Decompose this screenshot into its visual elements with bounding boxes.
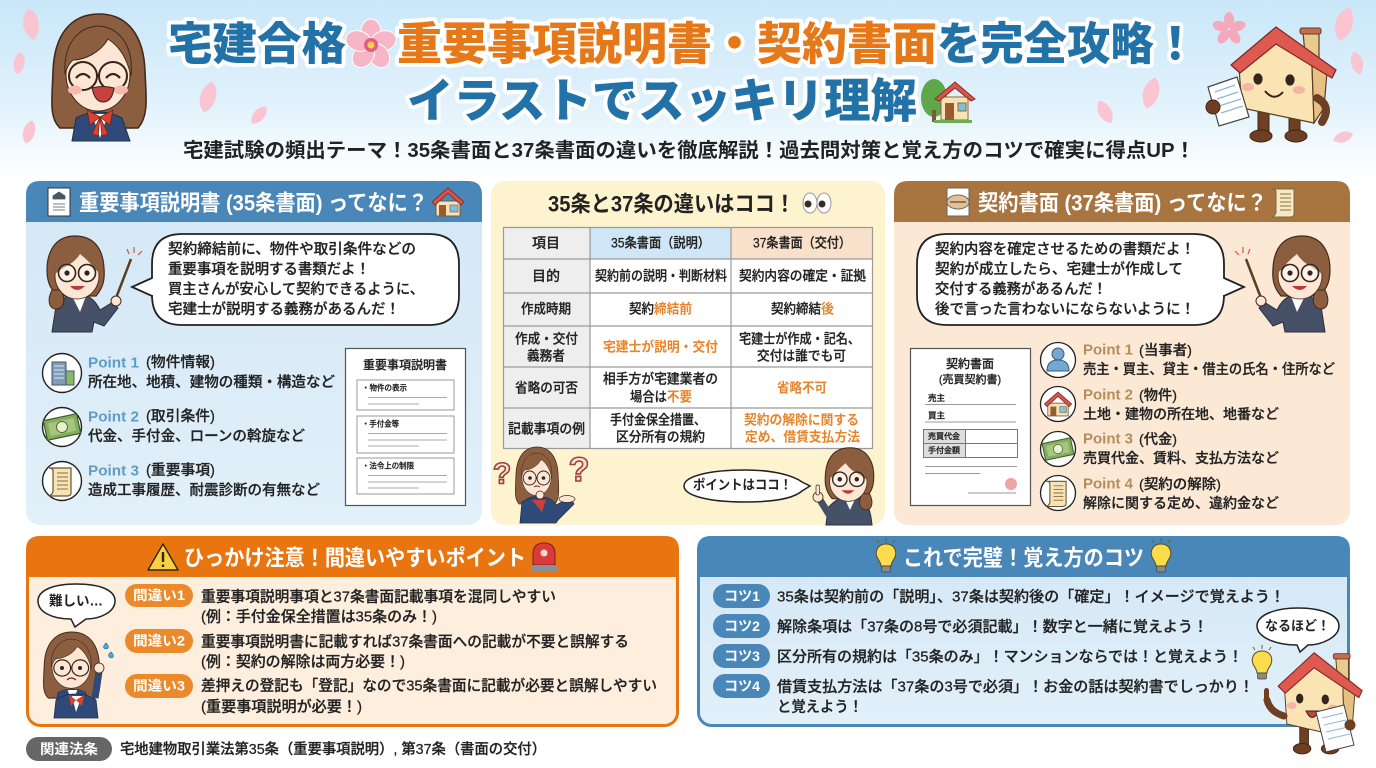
comparison table: 後 bbox=[821, 300, 834, 316]
comparison table: 37条書面（交付） bbox=[753, 234, 851, 250]
mistake 2: 間違い2 bbox=[133, 632, 185, 648]
document: 重要事項説明書: ・法令上の制限 bbox=[362, 460, 414, 470]
title line 2: イラストでスッキリ理解 bbox=[407, 74, 917, 128]
comparison table: 締結前 bbox=[654, 300, 692, 316]
point 1 bbox=[42, 354, 335, 392]
mistake 3 bbox=[125, 674, 657, 716]
tip 2: 解除条項は「37条の8号で必須記載」！数字と一緒に覚えよう！ bbox=[777, 618, 1208, 636]
heading: 違い: 35条と37条の違いはココ！ bbox=[548, 192, 795, 216]
document: 重要事項説明書: ・手付金等 bbox=[362, 418, 399, 428]
point 2: Point 2 bbox=[88, 408, 139, 426]
icon: light bulb right bbox=[1151, 538, 1171, 572]
mistake 1: 重要事項説明事項と37条書面記載事項を混同しやすい bbox=[201, 588, 556, 606]
document: 契約書面: 買主 bbox=[928, 410, 946, 420]
footer: related law bbox=[26, 737, 546, 761]
document: 重要事項説明書 bbox=[346, 348, 466, 506]
header sky background bbox=[0, 0, 1376, 178]
point 3: Point 3 bbox=[1083, 430, 1133, 448]
comparison table: 省略の可否 bbox=[515, 380, 578, 396]
mistake 1: 間違い1 bbox=[133, 587, 186, 603]
speech bubble: 35条: 契約締結前に、物件や取引条件などの bbox=[168, 240, 416, 258]
question marks: ? bbox=[493, 458, 511, 490]
comparison table: 義務者 bbox=[527, 348, 565, 364]
document: 契約書面: 手付金額 bbox=[928, 445, 960, 455]
comparison table: 契約前の説明・判断材料 bbox=[595, 268, 727, 284]
icon: house bbox=[432, 188, 464, 216]
mistake 2: 重要事項説明書に記載すれば37条書面への記載が不要と誤解する bbox=[201, 632, 629, 650]
document: 契約書面: 契約書面 bbox=[946, 356, 994, 371]
icon: light bulb left bbox=[876, 538, 896, 572]
point 2: 代金、手付金、ローンの斡旋など bbox=[88, 428, 305, 445]
panel: 35条と37条の違い bbox=[491, 181, 885, 525]
icon: house with tree bbox=[921, 79, 975, 123]
document: 契約書面 bbox=[910, 348, 1030, 506]
character: teacher bbox=[47, 236, 142, 332]
speech bubble: 35条: 重要事項を説明する書類だよ！ bbox=[168, 261, 370, 278]
tip 1 bbox=[713, 584, 1285, 608]
tip 3: 区分所有の規約は「35条のみ」！マンションならでは！と覚えよう！ bbox=[777, 648, 1243, 666]
comparison table: 作成時期 bbox=[521, 302, 571, 316]
point 1: (物件情報) bbox=[146, 354, 215, 371]
speech bubble: 37条: 交付する義務があるんだ！ bbox=[935, 280, 1107, 298]
tip 2 bbox=[713, 614, 1208, 638]
icon: building document bbox=[48, 188, 70, 216]
comparison table: 作成・交付 bbox=[515, 332, 578, 346]
comparison table: 区分所有の規約 bbox=[616, 430, 705, 444]
speech bubble: 35条: 買主さんが安心して契約できるように、 bbox=[168, 280, 424, 298]
document: 契約書面: 売買代金 bbox=[928, 431, 960, 441]
panel: ひっかけ注意 bbox=[26, 536, 679, 726]
point 3: 造成工事履歴、耐震診断の有無など bbox=[88, 482, 320, 499]
panel header: コツ bbox=[697, 536, 1350, 577]
comparison table: 項目 bbox=[532, 235, 560, 251]
title line 1 bbox=[168, 18, 1197, 70]
mistake 3: 間違い3 bbox=[133, 678, 186, 694]
speech bubble: ポイントはココ: ポイントはココ！ bbox=[693, 478, 792, 492]
speech bubble: なるほど: なるほど！ bbox=[1265, 618, 1330, 634]
tip 4 bbox=[713, 674, 1254, 716]
comparison table: 相手方が宅建業者の bbox=[603, 370, 718, 386]
speech bubble: 37条: 契約内容を確定させるための書類だよ！ bbox=[935, 241, 1195, 258]
comparison table: 場合は bbox=[630, 388, 667, 404]
point 3 bbox=[42, 462, 320, 500]
point 4: Point 4 bbox=[1083, 476, 1134, 492]
cherry blossom petals bbox=[12, 5, 1366, 145]
comparison table bbox=[503, 227, 873, 449]
point 2: (取引条件) bbox=[146, 408, 215, 425]
speech bubble: なるほど bbox=[1257, 608, 1339, 652]
panel: 35条書面 bbox=[26, 181, 482, 525]
point 1: 所在地、地積、建物の種類・構造など bbox=[88, 373, 335, 391]
character: smiling student bbox=[52, 14, 146, 141]
comparison table: 不要 bbox=[667, 390, 692, 404]
panel: 37条書面 bbox=[894, 181, 1350, 525]
tip 1: 35条は契約前の「説明」、37条は契約後の「確定」！イメージで覚えよう！ bbox=[777, 588, 1285, 606]
icon: eyes bbox=[803, 193, 831, 213]
icon: scroll bbox=[1272, 189, 1294, 217]
comparison table: 契約内容の確定・証拠 bbox=[739, 268, 866, 284]
point 1: Point 1 bbox=[1083, 342, 1133, 358]
heading: ひっかけ注意: ひっかけ注意！間違いやすいポイント bbox=[184, 546, 526, 570]
speech bubble: 35条: 宅建士が説明する義務があるんだ！ bbox=[168, 300, 400, 318]
document: 重要事項説明書: 重要事項説明書 bbox=[363, 357, 447, 372]
mistake 3: 差押えの登記も「登記」なので35条書面に記載が必要と誤解しやすい bbox=[201, 676, 657, 694]
speech bubble: ポイントはココ bbox=[684, 470, 810, 502]
point 3: Point 3 bbox=[88, 462, 139, 480]
comparison table: 定め、借賃支払方法 bbox=[745, 428, 860, 444]
comparison table: 宅建士が作成・記名、 bbox=[739, 330, 860, 346]
character: pointing teacher bbox=[813, 448, 874, 525]
comparison table: 宅建士が説明・交付 bbox=[603, 338, 718, 354]
mistake 3: (重要事項説明が必要！) bbox=[201, 698, 362, 716]
document: 契約書面: (売買契約書) bbox=[939, 372, 1001, 386]
point 3: (代金) bbox=[1139, 431, 1177, 447]
character: house mascot with document bbox=[1206, 27, 1336, 142]
character: thinking student bbox=[515, 447, 575, 523]
icon: cherry blossom bbox=[343, 19, 399, 72]
point 3 bbox=[1040, 430, 1279, 466]
icon: handshake document bbox=[947, 188, 969, 216]
title line 1: 重要事項説明書・契約書面 bbox=[397, 18, 937, 70]
speech bubble: 35条 bbox=[132, 234, 459, 325]
comparison table: 35条書面（説明） bbox=[611, 234, 710, 250]
comparison table: 省略不可 bbox=[777, 380, 827, 396]
speech bubble: 37条 bbox=[917, 234, 1244, 325]
point 2 bbox=[42, 408, 305, 446]
mistake 1 bbox=[125, 584, 556, 626]
icon: siren bbox=[531, 543, 557, 571]
document: 重要事項説明書: ・物件の表示 bbox=[362, 382, 407, 392]
title line 1: 宅建合格 bbox=[168, 18, 346, 70]
comparison table: 手付金保全措置、 bbox=[610, 412, 706, 428]
heading: コツ: これで完璧！覚え方のコツ bbox=[903, 546, 1144, 570]
tip 3 bbox=[713, 644, 1243, 668]
point 2: Point 2 bbox=[1083, 386, 1133, 404]
footer: related law: 関連法条 bbox=[40, 741, 98, 757]
tip 3: コツ3 bbox=[724, 648, 760, 664]
speech bubble: 難しい: 難しい… bbox=[49, 592, 103, 608]
tip 4: コツ4 bbox=[724, 678, 760, 694]
point 3: 売買代金、賃料、支払方法など bbox=[1083, 450, 1279, 466]
point 1 bbox=[1040, 342, 1335, 378]
speech bubble: 難しい bbox=[38, 584, 115, 627]
footer: related law: 宅地建物取引業法第35条（重要事項説明）, 第37条（書面の交付） bbox=[120, 740, 546, 758]
tip 4: と覚えよう！ bbox=[777, 698, 863, 716]
icon: warning triangle bbox=[148, 544, 178, 570]
comparison table: 契約の解除に関する bbox=[744, 412, 859, 428]
question marks bbox=[493, 451, 589, 490]
point 2: 土地・建物の所在地、地番など bbox=[1083, 406, 1279, 422]
comparison table: 契約締結 bbox=[771, 300, 821, 316]
point 4: (契約の解除) bbox=[1139, 476, 1221, 492]
point 1: (当事者) bbox=[1139, 342, 1192, 358]
tip 4: 借賃支払方法は「37条の3号で必須」！お金の話は契約書でしっかり！ bbox=[777, 678, 1254, 696]
character: teacher bbox=[1235, 236, 1330, 332]
point 2: (物件) bbox=[1139, 387, 1177, 403]
title line 1: を完全攻略！ bbox=[937, 18, 1197, 70]
icon: idea bulb bbox=[1252, 645, 1272, 679]
comparison table: 目的 bbox=[532, 268, 560, 284]
mistake 2: (例：契約の解除は両方必要！) bbox=[201, 654, 405, 670]
point 3: (重要事項) bbox=[146, 462, 215, 479]
point 4 bbox=[1040, 476, 1279, 511]
subtitle: 宅建試験の頻出テーマ！35条書面と37条書面の違いを徹底解説！過去問対策と覚え方のコツで確実に得点UP！ bbox=[183, 139, 1195, 162]
mistake 1: (例：手付金保全措置は35条のみ！) bbox=[201, 608, 437, 626]
character: house mascot pointing bbox=[1264, 653, 1362, 754]
comparison table: 交付は誰でも可 bbox=[757, 348, 846, 364]
tip 2: コツ2 bbox=[724, 618, 760, 634]
point 1: 売主・買主、貸主・借主の氏名・住所など bbox=[1083, 361, 1335, 377]
panel header: 35条 bbox=[26, 181, 482, 222]
comparison table: 契約 bbox=[629, 302, 654, 316]
character: worried student bbox=[44, 632, 114, 718]
speech bubble: 37条: 契約が成立したら、宅建士が作成して bbox=[935, 260, 1183, 278]
heading: 37条: 契約書面 (37条書面) ってなに？ bbox=[978, 190, 1267, 216]
point 1: Point 1 bbox=[88, 354, 139, 372]
mistake 2 bbox=[125, 629, 629, 670]
tip 1: コツ1 bbox=[724, 588, 760, 604]
speech bubble: 37条: 後で言った言わないにならないように！ bbox=[935, 301, 1195, 318]
question marks: ? bbox=[569, 451, 589, 489]
panel: 覚え方のコツ bbox=[697, 536, 1350, 726]
panel header: ひっかけ注意 bbox=[26, 536, 679, 577]
panel header: 37条 bbox=[894, 181, 1350, 222]
comparison table: 記載事項の例 bbox=[508, 422, 585, 436]
heading: 35条: 重要事項説明書 (35条書面) ってなに？ bbox=[79, 190, 428, 216]
document: 契約書面: 売主 bbox=[928, 393, 946, 403]
point 2 bbox=[1040, 386, 1279, 422]
point 4: 解除に関する定め、違約金など bbox=[1083, 495, 1279, 511]
